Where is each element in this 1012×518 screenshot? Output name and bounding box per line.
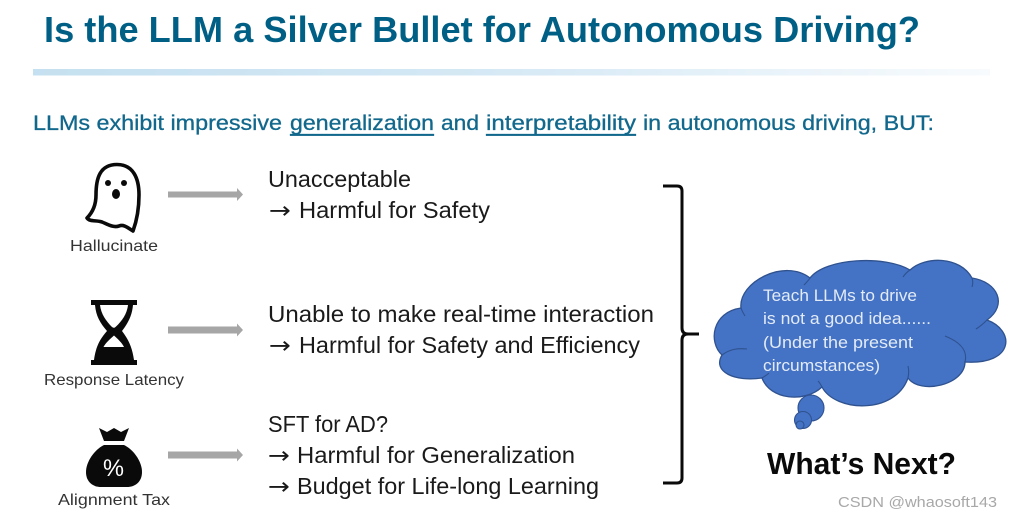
- row 3 text: Harmful for Generalization: [297, 442, 575, 468]
- subheading: and: [441, 112, 479, 135]
- row 3 text: [268, 411, 599, 500]
- watermark: CSDN @whaosoft143: [838, 494, 997, 511]
- row 2 text: Unable to make real-time interaction: [268, 301, 654, 327]
- row 3 text: SFT for AD?: [268, 411, 388, 437]
- row 3 text: →: [268, 474, 290, 500]
- row 1 text: →: [269, 198, 291, 224]
- row 1: hallucinate: [70, 164, 158, 255]
- cloud text: [763, 286, 931, 375]
- right bracket: [663, 186, 699, 483]
- row 3: alignment tax: [58, 428, 170, 509]
- cloud inner creases: [722, 270, 987, 387]
- icon: money bag: %: [103, 455, 124, 482]
- subheading: interpretability: [486, 112, 637, 135]
- subheading: [33, 112, 934, 136]
- title divider bar: [33, 69, 990, 76]
- arrow 3: [168, 448, 243, 462]
- cloud body: [714, 260, 1006, 406]
- cloud text: (Under the present: [763, 333, 913, 352]
- What's Next heading: What’s Next?: [767, 446, 956, 481]
- cloud text: circumstances): [763, 356, 880, 375]
- label: Response Latency: Response Latency: [44, 372, 184, 389]
- row 3 text: Budget for Life-long Learning: [297, 473, 599, 499]
- label: Alignment Tax: Alignment Tax: [58, 492, 170, 509]
- subheading: LLMs exhibit impressive: [33, 112, 282, 135]
- subheading: in autonomous driving, BUT:: [643, 112, 934, 135]
- row 1 text: Unacceptable: [268, 166, 411, 192]
- row 1 text: Harmful for Safety: [299, 197, 491, 223]
- row 2 text: [268, 301, 654, 359]
- title: Is the LLM a Silver Bullet for Autonomous Driving?: [44, 9, 920, 50]
- thought bubbles: [794, 395, 824, 429]
- row 3 text: →: [268, 443, 290, 469]
- icon: ghost: [87, 164, 139, 231]
- cloud text: is not a good idea......: [763, 309, 931, 328]
- row 1 text: [268, 166, 491, 224]
- row 2 text: →: [269, 333, 291, 359]
- row 2: response latency: [44, 300, 184, 389]
- arrow 1: [168, 188, 243, 201]
- thought cloud: [714, 260, 1006, 429]
- arrow 2: [168, 324, 243, 336]
- cloud text: Teach LLMs to drive: [763, 286, 917, 305]
- label: Hallucinate: Hallucinate: [70, 238, 158, 255]
- row 2 text: Harmful for Safety and Efficiency: [299, 332, 641, 358]
- icon: hourglass: [91, 300, 137, 365]
- subheading: generalization: [290, 112, 434, 135]
